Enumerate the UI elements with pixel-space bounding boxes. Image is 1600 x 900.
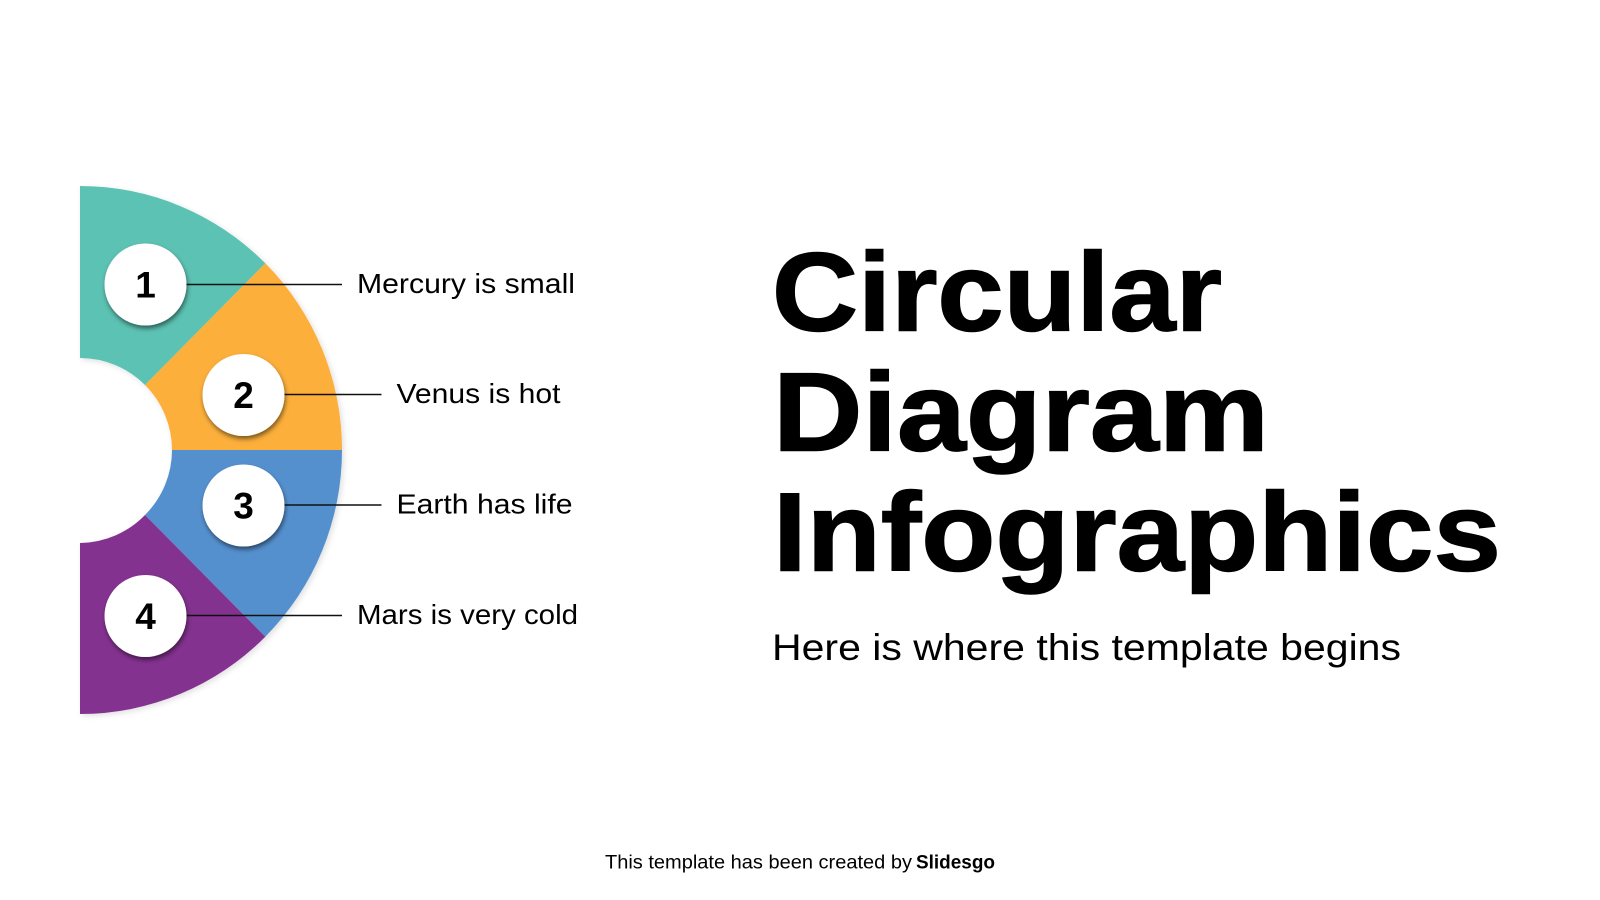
segment 3: blue <box>145 450 342 637</box>
footer credit: This template has been created by <box>605 852 913 874</box>
segment 1: teal <box>80 186 265 385</box>
number badge 1 <box>104 244 186 326</box>
label: Earth: Earth has life <box>396 488 572 520</box>
segment 4: purple <box>80 515 265 714</box>
segment 2: orange <box>145 263 342 450</box>
number badge 2: 2 <box>233 375 254 416</box>
number badge 3 <box>202 464 284 546</box>
number badge 2 <box>202 354 284 436</box>
label: Mars: Mars is very cold <box>357 599 578 630</box>
subtitle: Here is where this template begins <box>772 627 1401 668</box>
title <box>772 230 1501 594</box>
number badge 4 <box>104 575 186 657</box>
connector line 4 <box>186 614 342 616</box>
label: Venus: Venus is hot <box>396 378 561 409</box>
title line 2: Diagram <box>773 350 1269 474</box>
title line 1: Circular <box>772 230 1222 354</box>
title line 3: Infographics <box>773 470 1501 594</box>
connector line 1 <box>186 284 342 286</box>
semicircle segments <box>80 186 342 714</box>
footer brand: Slidesgo <box>916 852 995 874</box>
connector line 2 <box>284 394 382 396</box>
connector line 3 <box>284 504 382 506</box>
circular diagram <box>80 186 382 714</box>
number badge 1: 1 <box>135 264 156 306</box>
label: Mercury: Mercury is small <box>357 268 575 299</box>
number badge 4: 4 <box>135 596 156 637</box>
number badge 3: 3 <box>233 486 254 526</box>
